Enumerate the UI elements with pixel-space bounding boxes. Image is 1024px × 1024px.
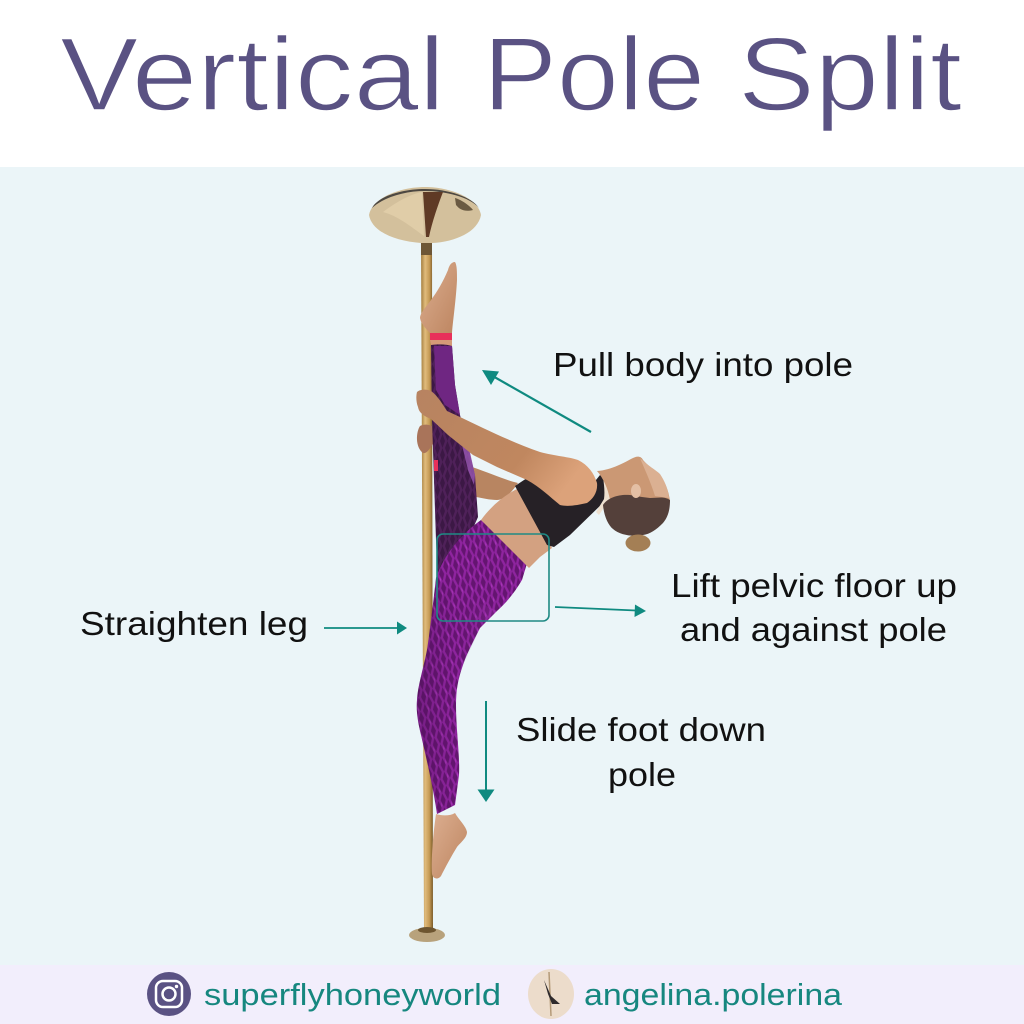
ankle band xyxy=(430,333,452,340)
hair xyxy=(603,495,670,536)
label: lift pelvic floor: Lift pelvic floor up xyxy=(671,567,957,604)
arrowhead: pull body xyxy=(482,370,499,385)
raised leg highlights xyxy=(462,445,475,485)
panel: title band xyxy=(0,0,1024,167)
torso xyxy=(481,489,552,568)
top foot xyxy=(420,262,457,333)
ear xyxy=(631,484,641,498)
label: slide foot down pole: Slide foot down xyxy=(516,711,766,748)
arrowhead: straighten leg xyxy=(397,622,407,634)
arrow: lift pelvic floor xyxy=(555,607,636,610)
lower arm behind leg xyxy=(472,467,518,500)
label: straighten leg: Straighten leg xyxy=(80,605,308,642)
bra strap highlight xyxy=(596,477,610,515)
label: pull body into pole: Pull body into pole xyxy=(553,346,853,383)
label: lift pelvic floor xyxy=(671,567,957,648)
arrow: slide foot down xyxy=(485,701,487,790)
lower leg shading xyxy=(417,578,497,814)
illustration: athlete on pole xyxy=(369,187,670,942)
title: Pole xyxy=(483,17,705,133)
arrowhead: slide foot down xyxy=(478,790,494,802)
arrow: pull body into pole xyxy=(490,374,591,432)
panel: footer band xyxy=(0,965,1024,1024)
label: lift pelvic floor: and against pole xyxy=(680,611,947,648)
lower hand xyxy=(417,425,434,453)
handle: superflyhoneyworld: superflyhoneyworld xyxy=(204,977,501,1012)
title xyxy=(60,17,962,133)
arrowhead: lift pelvic floor xyxy=(634,604,646,617)
upper arm xyxy=(416,390,597,506)
highlight box: pelvis xyxy=(437,534,549,621)
neck and face xyxy=(597,457,670,502)
icon: instagram xyxy=(147,972,191,1016)
face highlight xyxy=(640,458,669,498)
arrow: straighten leg xyxy=(324,627,398,629)
pole xyxy=(369,187,481,942)
hair bun xyxy=(626,534,650,552)
lower foot xyxy=(432,813,467,878)
ceiling plate xyxy=(369,187,481,243)
lower leg xyxy=(417,520,528,814)
raised leg xyxy=(431,344,478,600)
raised leg upper highlight xyxy=(434,346,460,415)
label: slide foot down pole xyxy=(516,711,766,793)
red strap behind leg xyxy=(434,460,438,471)
title: Split xyxy=(738,17,962,133)
sports bra xyxy=(515,475,607,547)
title: Vertical xyxy=(60,17,445,133)
avatar: angelina polerina xyxy=(528,969,574,1019)
handle: angelina.polerina: angelina.polerina xyxy=(584,977,843,1012)
label: slide foot down pole: pole xyxy=(608,756,676,793)
panel: main background xyxy=(0,167,1024,965)
